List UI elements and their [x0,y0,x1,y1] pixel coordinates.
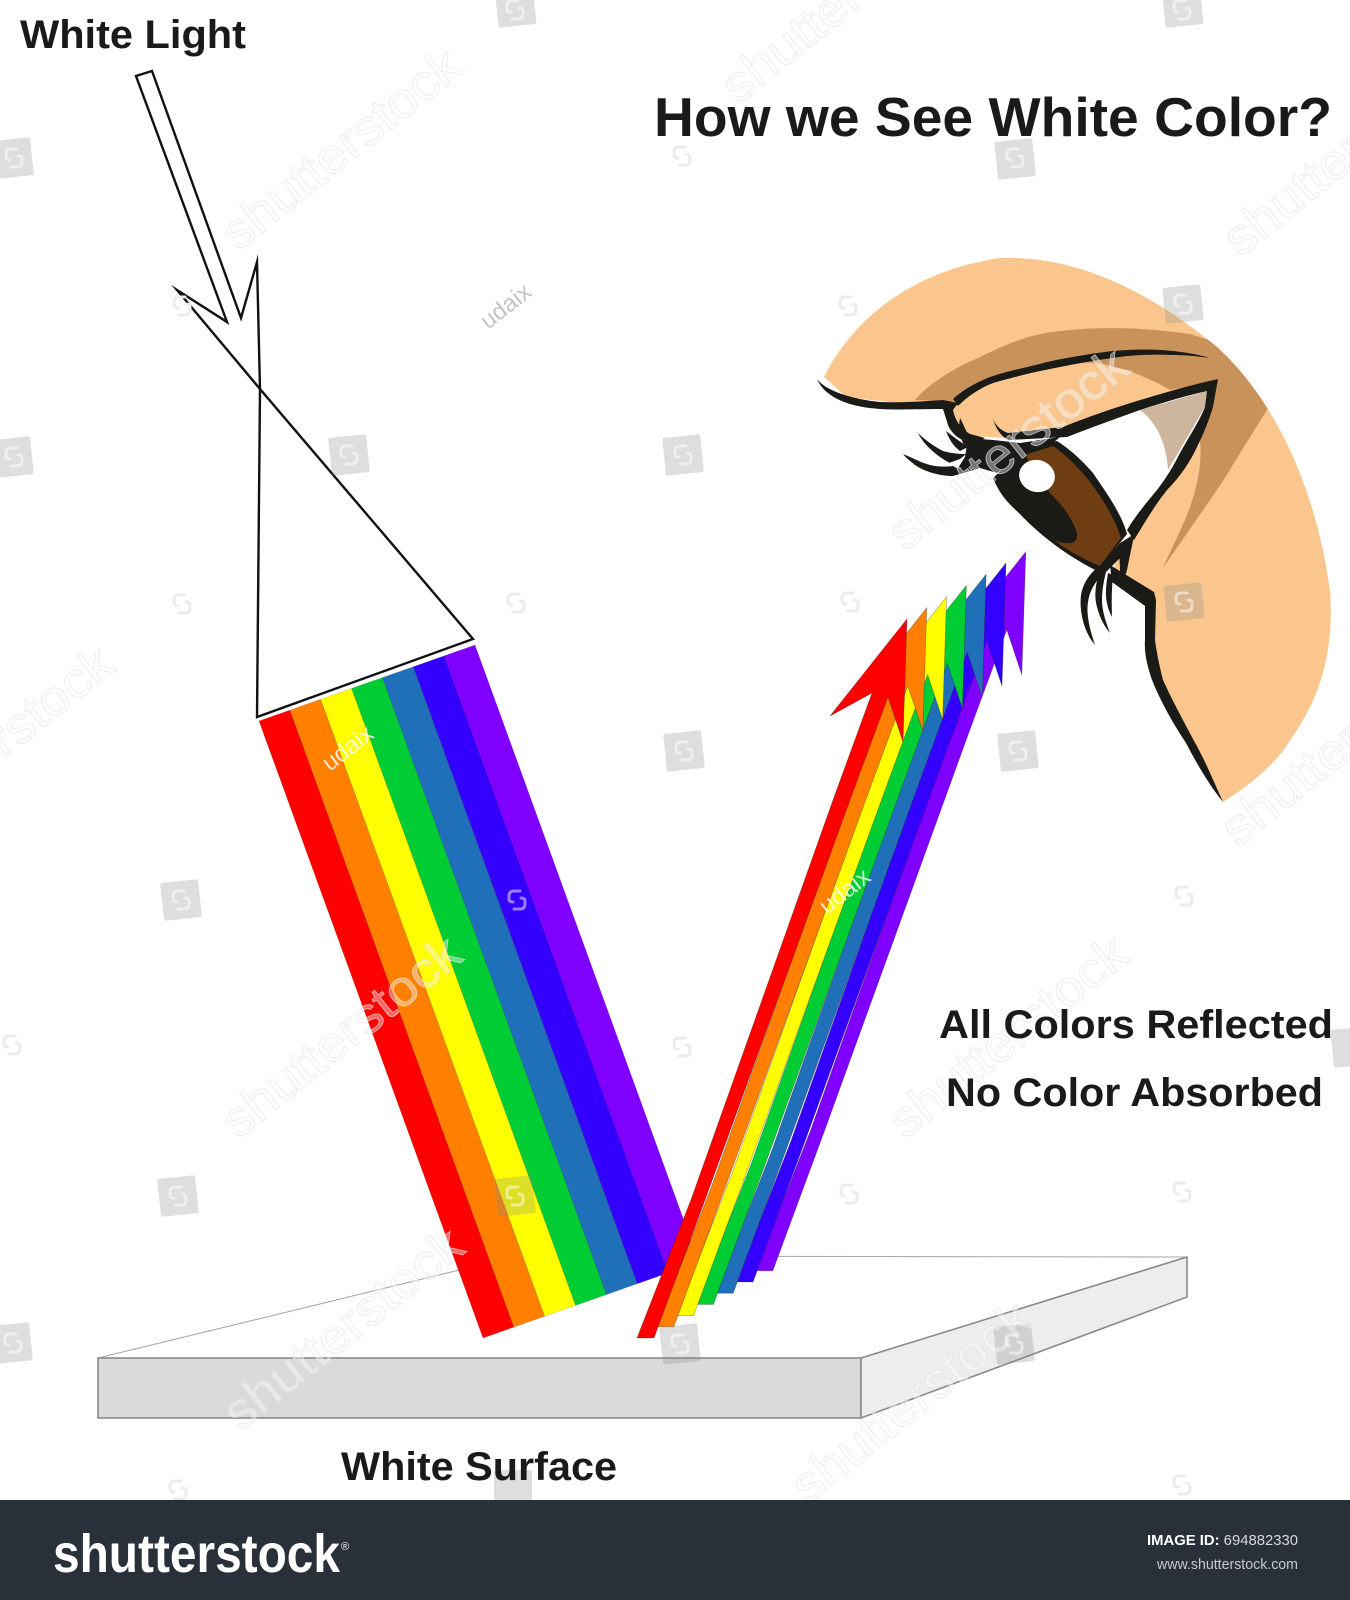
watermark overlay: udaix [317,720,379,777]
eye illustration [817,258,1331,802]
eye highlight [1015,456,1059,496]
watermark overlay: shutterstock [210,924,473,1149]
watermark overlay: shutterstock [877,336,1140,561]
footer image id: IMAGE ID: 694882330 [1147,1532,1298,1549]
watermark overlay: shutterstock [877,924,1140,1149]
label: White Light: White Light [20,13,246,57]
lower eyelashes [1081,535,1134,645]
white surface slab [98,1256,1187,1418]
nose profile line [1110,565,1223,802]
caption: reflection note: No Color Absorbed [946,1071,1323,1115]
face skin [824,258,1331,802]
eyelid shadow [915,328,1270,568]
watermark overlay: shutterstock [212,1216,475,1441]
inner eye corner [1140,391,1207,470]
sclera outline and eye base [993,441,1127,571]
pupil [996,452,1077,543]
reflected rainbow arrows [637,552,1026,1338]
dispersed rainbow band [259,645,699,1338]
caption: reflection note: All Colors Reflected [939,1003,1333,1047]
title: How we See White Color? [654,86,1332,148]
footer registered mark: ® [341,1541,349,1553]
white light arrow and prism [136,71,473,717]
watermark overlay: udaix [814,863,876,920]
iris [1022,446,1121,566]
footer bar [0,1500,1350,1600]
upper eyelashes [903,418,1060,476]
watermark overlay: udaix [475,278,537,335]
label: White Surface: White Surface [341,1445,617,1489]
footer logo: shutterstock [53,1524,341,1584]
brow line [817,379,985,444]
watermark overlay: shutterstock [210,36,473,261]
upper lid crease [953,350,1210,406]
watermark overlay: shutterstock [780,1289,1043,1514]
upper eyelid and lid corner [993,379,1218,540]
caption: reflection note [939,1003,1333,1115]
footer url: www.shutterstock.com [1156,1556,1298,1573]
